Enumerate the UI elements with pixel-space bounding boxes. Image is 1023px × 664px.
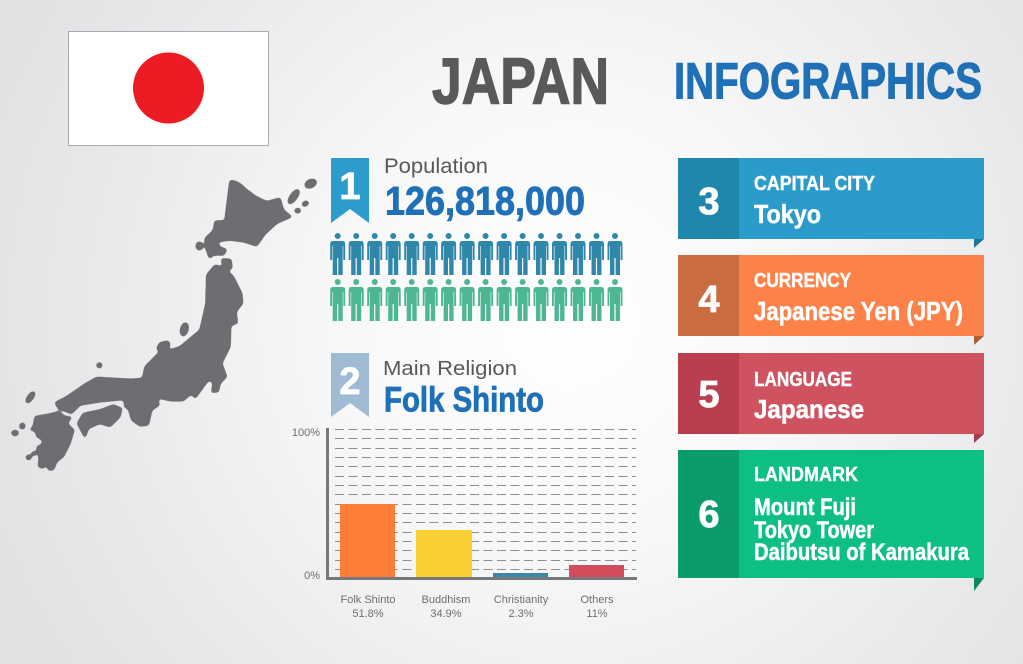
section 2: main religion bbox=[331, 353, 544, 420]
bar labels: Buddhism bbox=[422, 594, 470, 606]
axis labels bbox=[292, 427, 320, 582]
religion value: Folk Shinto bbox=[384, 380, 544, 420]
axes bbox=[326, 428, 637, 580]
ribbon 2: 2 bbox=[339, 361, 361, 403]
title: Japan: JAPAN bbox=[432, 44, 609, 118]
panel 6: landmark: Tokyo Tower bbox=[754, 517, 874, 544]
ribbon 1 bbox=[331, 158, 369, 223]
pictogram row: blue people bbox=[330, 233, 622, 275]
bar labels: 11% bbox=[586, 608, 608, 620]
bar labels: 34.9% bbox=[430, 608, 462, 620]
axis labels: 0% bbox=[304, 570, 320, 582]
panel 6: landmark: Mount Fuji bbox=[754, 494, 856, 521]
panel 4: currency bbox=[678, 255, 984, 345]
ribbon 1: 1 bbox=[339, 166, 361, 208]
flag of Japan bbox=[68, 32, 268, 146]
panel 3: capital city: Tokyo bbox=[754, 199, 821, 229]
pictogram row: green people bbox=[330, 279, 622, 321]
bar labels: Others bbox=[580, 594, 614, 606]
bar labels bbox=[340, 594, 614, 620]
bar labels: Christianity bbox=[494, 594, 549, 606]
panel 4: currency: Japanese Yen (JPY) bbox=[754, 296, 963, 326]
ribbon 2 bbox=[331, 353, 369, 417]
bar labels: Folk Shinto bbox=[340, 594, 396, 606]
bar labels: 51.8% bbox=[352, 608, 384, 620]
population label: Population bbox=[384, 155, 488, 178]
bar chart bbox=[292, 427, 637, 620]
panel 5: language: 5 bbox=[698, 374, 720, 416]
panel 6: landmark: LANDMARK bbox=[754, 464, 858, 486]
panel 6: landmark bbox=[678, 450, 984, 591]
panel 5: language: LANGUAGE bbox=[754, 369, 852, 391]
bar: Folk Shinto bbox=[340, 504, 395, 577]
bar labels: 2.3% bbox=[508, 608, 534, 620]
panel 3: capital city: 3 bbox=[698, 181, 720, 223]
bar: Buddhism bbox=[416, 530, 472, 577]
panel 6: landmark: Daibutsu of Kamakura bbox=[754, 539, 970, 566]
bar: Christianity bbox=[493, 573, 548, 577]
religion label: Main Religion bbox=[383, 358, 517, 380]
map of Japan bbox=[12, 178, 318, 470]
panel 3: capital city bbox=[678, 158, 984, 248]
population number: 126,818,000 bbox=[385, 180, 585, 224]
axis labels: 100% bbox=[292, 427, 320, 439]
panel 5: language: Japanese bbox=[754, 394, 864, 424]
bar: Others bbox=[569, 565, 624, 577]
panel 4: currency: 4 bbox=[698, 279, 720, 321]
panel 3: capital city: CAPITAL CITY bbox=[754, 173, 876, 195]
panel 4: currency: CURRENCY bbox=[754, 270, 852, 292]
section 1: population bbox=[330, 155, 622, 321]
panel 5: language bbox=[678, 353, 984, 443]
panel 6: landmark: 6 bbox=[698, 494, 720, 536]
